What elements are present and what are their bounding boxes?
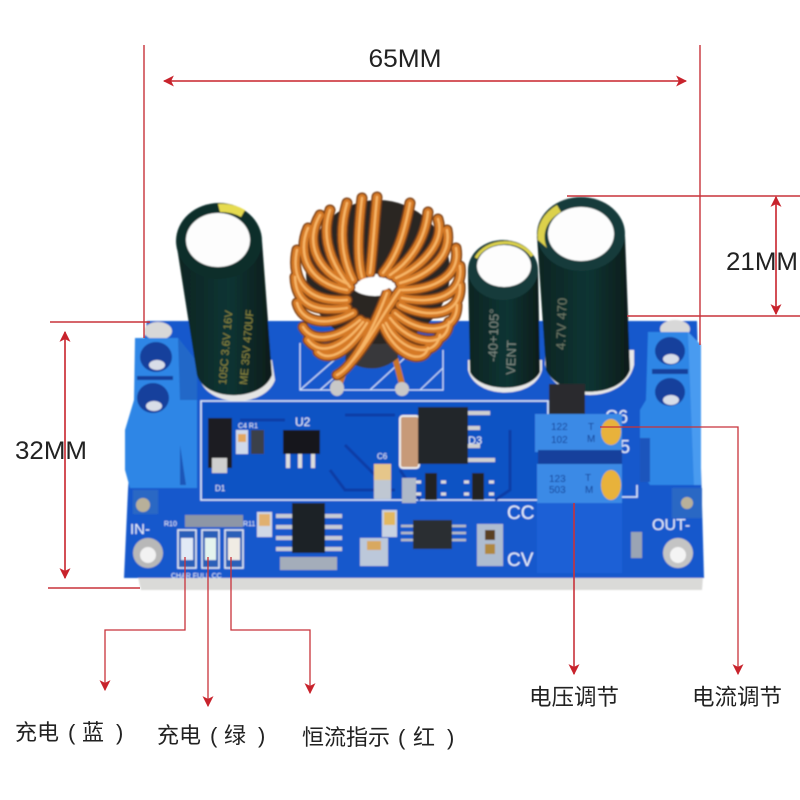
trimmer potentiometers: 122 (551, 422, 568, 433)
parts C5 (477, 524, 503, 566)
trimmer potentiometers: 102 (551, 435, 568, 446)
leader: voltage adjust (573, 503, 575, 674)
label: constant current red: 红 (413, 725, 435, 750)
silk hatch box under coil (300, 343, 443, 390)
mounting hole: bottom left (133, 538, 163, 568)
chip U2: U2 (295, 415, 311, 429)
silk frame near trimmer (622, 485, 637, 497)
dimension: 65MM (144, 45, 700, 345)
small pad left (133, 490, 158, 514)
resistor R7 (402, 478, 416, 503)
transistor Q2 (464, 473, 494, 500)
trimmer potentiometers: T (585, 473, 591, 484)
capacitor: right tall: 4.7V 470 (553, 298, 570, 350)
label: charging green: 绿 (224, 723, 246, 748)
label: charging blue: ( (68, 720, 76, 745)
diode D1 (208, 418, 232, 493)
parts C4 R1 (236, 423, 264, 454)
copper tab (400, 416, 419, 468)
trimmer potentiometers: 123 (549, 474, 566, 485)
trimmer potentiometers: M (587, 434, 595, 445)
capacitor C6 (374, 452, 391, 499)
silk labels CHAR FULL CC: CHAR FULL CC (171, 573, 222, 580)
leader: blue charge LED (105, 557, 185, 690)
leader: green charge LED (207, 557, 209, 706)
parts C4 R1: C4 R1 (238, 423, 258, 430)
LED: charging green (202, 530, 219, 568)
chip SOP8 left (276, 503, 342, 553)
capacitor C6: C6 (377, 452, 388, 461)
photo: circuit board module (124, 197, 704, 590)
chip U2 (283, 415, 320, 468)
label: charging green: ) (258, 723, 265, 748)
parts R12 (631, 532, 642, 558)
small pad right (672, 488, 702, 518)
capacitor: left: ME 35V 470UF (238, 309, 257, 385)
silk C6 label on board: C6 (605, 407, 628, 427)
terminal block: output (640, 332, 701, 485)
label: voltage adjust: 电压调节 (529, 685, 619, 710)
board edge strip (138, 577, 703, 590)
silk label OUT-: OUT- (652, 517, 690, 534)
label: constant current red: ) (447, 725, 454, 750)
transistor Q1 (416, 473, 446, 500)
mounting hole: top left (144, 322, 172, 340)
capacitor: right small: VENT (503, 340, 519, 375)
trimmer potentiometers: T (588, 422, 594, 433)
coil centre opening (358, 277, 392, 291)
parts R10 row: R10 (164, 521, 177, 528)
parts R10 row: R11 (243, 521, 255, 528)
capacitor: right small: -40+105° (485, 308, 502, 362)
leader: current adjust (600, 427, 738, 674)
dimension: 21MM: 21MM (726, 248, 798, 276)
dimension: 21MM (567, 196, 800, 316)
mounting hole: bottom right (663, 538, 693, 568)
mounting hole: top right (660, 320, 690, 338)
dark copper area under trimmers (510, 404, 540, 500)
label: charging green: 充电 (157, 723, 201, 748)
parts R8 R9 row (280, 557, 337, 570)
capacitor: left: 105C 3.6V 16V (217, 309, 236, 385)
silk label CV: CV (507, 550, 534, 571)
LED: constant current red (225, 530, 243, 568)
label: constant current red: ( (398, 725, 406, 750)
board pcb (124, 321, 704, 578)
label: charging blue: 充电 (15, 720, 59, 745)
label: current adjust: 电流调节 (692, 685, 782, 710)
parts C1 (382, 510, 397, 537)
pcb traces (240, 415, 510, 500)
label: charging green: ( (210, 723, 218, 748)
parts C2 R2 (360, 538, 388, 566)
trimmer potentiometers: 503 (549, 485, 566, 496)
label: charging blue: 蓝 (82, 720, 104, 745)
pcb silk frame (201, 401, 548, 500)
chip SOP8 right (401, 520, 466, 549)
capacitor: left (176, 203, 275, 401)
dimension: 65MM: 65MM (368, 45, 442, 73)
dimension: 32MM (15, 322, 150, 588)
silk 5 label on board: 5 (620, 437, 630, 457)
trimmer potentiometers (535, 414, 622, 573)
diode D1: D1 (215, 484, 226, 493)
label: constant current red: 恒流指示 (302, 725, 390, 750)
dimension: 32MM: 32MM (15, 437, 87, 465)
capacitor: right small (468, 240, 542, 392)
terminal block: input (125, 338, 197, 488)
silk label CC: CC (507, 503, 534, 524)
silk label IN-: IN- (130, 521, 150, 538)
parts R10 row (164, 515, 255, 528)
label: charging blue: ) (116, 720, 123, 745)
parts C8 (257, 512, 272, 537)
toroid inductor (295, 197, 460, 396)
MOSFET under capacitor (549, 384, 585, 416)
LED: charging blue (178, 530, 196, 568)
power transistor Q3: D3 (468, 435, 482, 447)
leader: red constant current LED (231, 557, 310, 693)
power transistor Q3 (418, 407, 495, 464)
trimmer potentiometers: M (585, 485, 593, 496)
capacitor: right tall (537, 197, 634, 395)
